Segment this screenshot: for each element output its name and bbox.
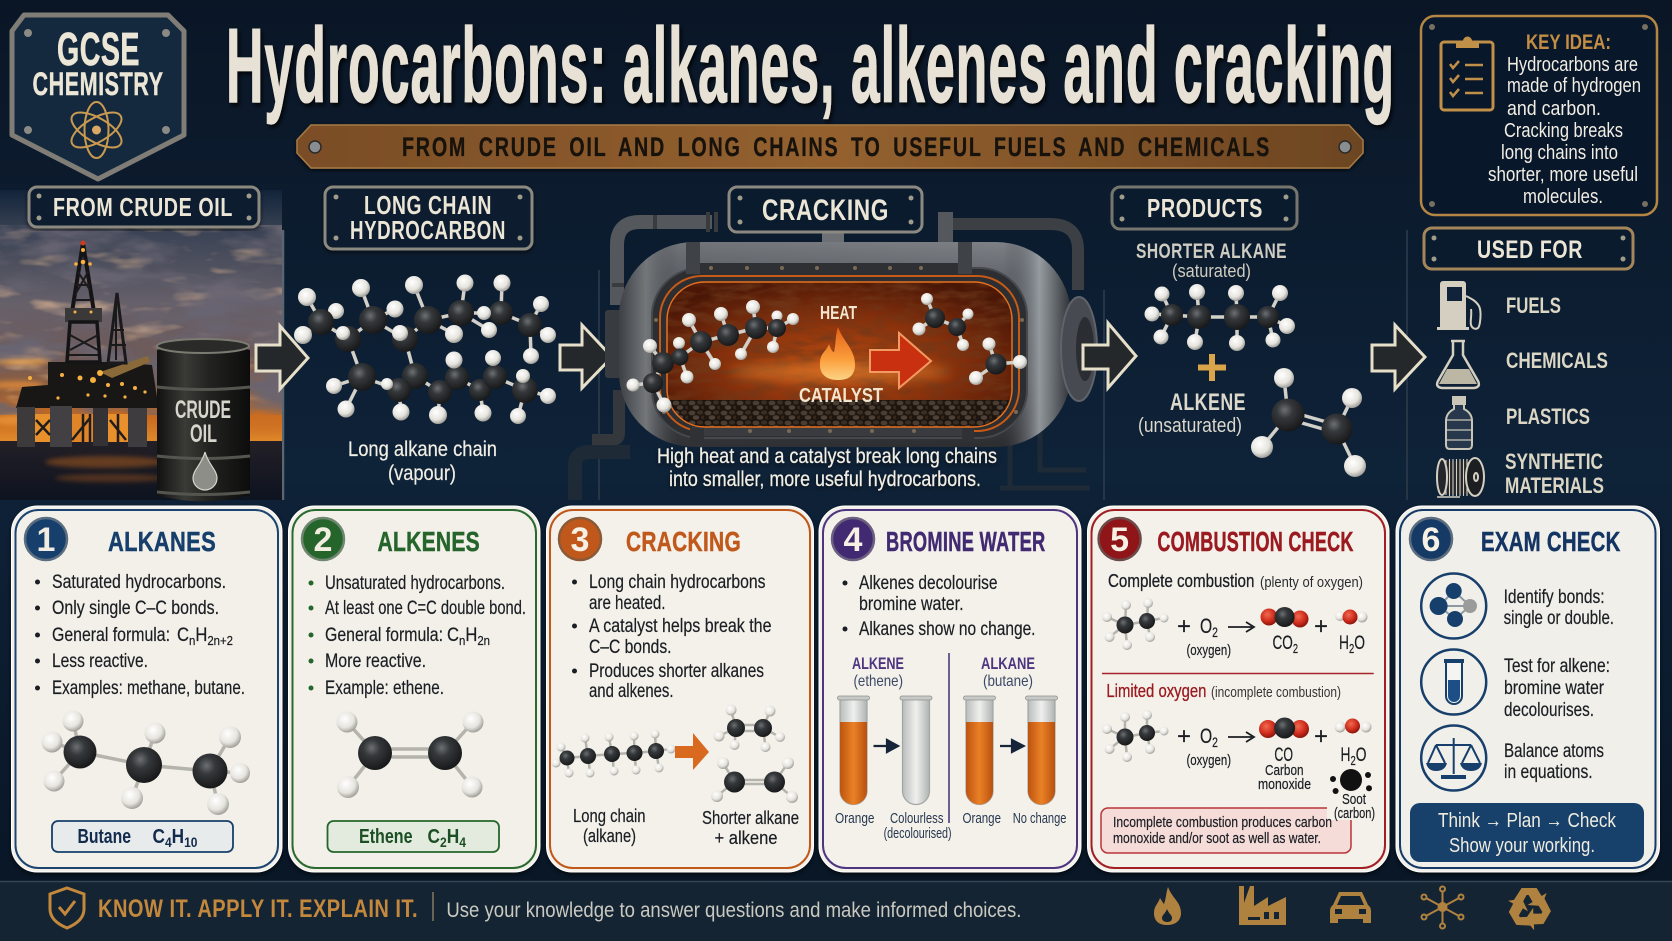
molecule: long chain entering xyxy=(626,300,799,412)
test: alkene xyxy=(835,654,952,842)
subtitle plaque: FROM CRUDE OIL AND LONG CHAINS TO USEFUL FUELS AND CHEMICALS xyxy=(402,132,1271,162)
test: alkene: Orange xyxy=(835,810,874,827)
caption: cracking: High heat and a catalyst break long chains xyxy=(657,445,997,468)
icon: bonds xyxy=(1421,574,1486,638)
check: balance: Balance atoms xyxy=(1504,741,1604,762)
icon: spool xyxy=(1437,458,1484,497)
limited oxygen xyxy=(1102,681,1372,793)
number badge xyxy=(1410,518,1452,560)
icon: flame xyxy=(820,327,855,380)
test: alkane xyxy=(962,654,1066,827)
arrow: crude oil to long chain xyxy=(256,326,308,389)
formula label: 10 xyxy=(184,834,198,850)
plate: products xyxy=(1112,187,1297,229)
number badge xyxy=(25,518,67,560)
molecule: alkene xyxy=(1251,368,1366,477)
bullet list: 2n xyxy=(477,633,490,648)
plate: used for xyxy=(1424,228,1633,269)
barrel: crude oil: CRUDE xyxy=(175,396,231,424)
bullet list: C xyxy=(177,625,191,646)
test: alkene: (ethene) xyxy=(854,673,903,690)
label: shorter alkane: (saturated) xyxy=(1172,261,1251,281)
subtitle plaque xyxy=(297,125,1363,168)
key idea text: and carbon. xyxy=(1507,98,1601,120)
number badge: 4 xyxy=(844,521,863,559)
formula label: C xyxy=(428,826,442,848)
complete combustion xyxy=(1102,571,1368,659)
bullet list: Alkanes show no change. xyxy=(859,619,1036,640)
bullet list: H xyxy=(465,625,477,646)
bullet list: are heated. xyxy=(589,593,666,614)
complete combustion: + xyxy=(1177,613,1191,640)
heading: ALKENES xyxy=(378,526,480,557)
formula label: H xyxy=(172,826,184,848)
plate: From crude oil: FROM CRUDE OIL xyxy=(53,192,233,222)
icon: atom xyxy=(66,102,127,158)
formula label xyxy=(52,821,233,852)
icon: tube orange xyxy=(964,696,996,804)
callout: show your working xyxy=(1410,803,1644,862)
check: alkene test: decolourises. xyxy=(1504,700,1594,721)
plate: cracking: CRACKING xyxy=(762,194,889,227)
use: synthetic materials xyxy=(1437,449,1604,498)
number badge: 2 xyxy=(314,521,332,559)
number badge xyxy=(1099,518,1141,560)
use: synthetic materials: SYNTHETIC xyxy=(1505,449,1603,474)
soot xyxy=(1330,769,1375,822)
molecules: products xyxy=(711,704,798,803)
check: alkene test xyxy=(1421,650,1610,721)
limited oxygen: + xyxy=(1177,723,1191,750)
key idea text: molecules. xyxy=(1523,186,1603,208)
arrow: cracking xyxy=(675,733,709,770)
complete combustion: CO xyxy=(1272,633,1301,654)
limited oxygen: H xyxy=(1340,745,1354,766)
arrow: products to uses xyxy=(1372,325,1425,389)
plate: long chain hydrocarbon: HYDROCARBON xyxy=(350,215,506,245)
caption: long alkane chain xyxy=(348,438,497,485)
limited oxygen: CO xyxy=(1274,745,1293,766)
number badge: 3 xyxy=(571,521,589,559)
badge: GCSE Chemistry xyxy=(12,15,184,179)
formula label: Ethene xyxy=(359,826,412,848)
key idea text: Hydrocarbons are xyxy=(1507,54,1638,76)
limited oxygen: O xyxy=(1356,745,1366,766)
heading: BROMINE WATER xyxy=(886,526,1046,557)
callout: incomplete combustion: Incomplete combustion produces carbon xyxy=(1113,814,1332,831)
bullet list: and alkenes. xyxy=(589,681,674,702)
key idea text: KEY IDEA: xyxy=(1526,31,1611,54)
number badge: 5 xyxy=(1110,521,1129,559)
icon: tube orange xyxy=(838,696,870,804)
footer message: Use your knowledge to answer questions and make informed choices. xyxy=(446,899,1021,922)
icon: test tube xyxy=(1421,650,1486,714)
bullet list: Only single C–C bonds. xyxy=(52,598,219,619)
molecule: ethane xyxy=(1102,598,1168,650)
formula label: 2 xyxy=(440,834,447,850)
complete combustion: (oxygen) xyxy=(1186,642,1231,659)
bullet list: Produces shorter alkanes xyxy=(589,661,764,682)
caption: long alkane chain: (vapour) xyxy=(388,462,456,485)
bullet list: More reactive. xyxy=(325,651,426,672)
complete combustion: Complete combustion xyxy=(1108,571,1254,591)
icon: clipboard xyxy=(1441,37,1493,110)
icon: car xyxy=(1330,892,1371,923)
icon: scales xyxy=(1421,726,1486,790)
footer slogan: KNOW IT. APPLY IT. EXPLAIN IT. xyxy=(98,895,418,923)
test: alkene: ALKENE xyxy=(852,654,904,673)
reactor window xyxy=(667,282,1012,427)
captions: Long chain xyxy=(573,806,646,826)
key idea text: long chains into xyxy=(1501,142,1618,164)
icon: oil rig xyxy=(16,240,157,447)
plate: From crude oil xyxy=(29,187,259,227)
check: alkene test: Test for alkene: xyxy=(1504,656,1610,677)
plate: used for: USED FOR xyxy=(1477,236,1583,264)
heading: CRACKING xyxy=(626,526,741,557)
label: shorter alkane: SHORTER ALKANE xyxy=(1136,240,1287,263)
scene: oil rig at sunset xyxy=(0,190,290,501)
number badge: 6 xyxy=(1422,521,1440,559)
bullet list xyxy=(842,573,1036,640)
catalyst bed xyxy=(667,400,1012,427)
label: alkene xyxy=(1138,389,1246,437)
clouds xyxy=(0,225,290,432)
use: plastics xyxy=(1446,397,1590,449)
panel 3: cracking xyxy=(546,506,814,872)
bullet list xyxy=(35,572,245,699)
number badge xyxy=(559,518,601,560)
soot: Soot xyxy=(1342,791,1367,808)
arrow: long chain to cracker xyxy=(560,325,612,388)
bullet list: Alkenes decolourise xyxy=(859,573,998,594)
plate: products: PRODUCTS xyxy=(1147,193,1263,223)
use: chemicals: CHEMICALS xyxy=(1506,348,1608,373)
use: fuels: FUELS xyxy=(1506,293,1561,318)
test: alkene: (decolourised) xyxy=(884,825,952,842)
test: alkene: Colourless xyxy=(890,810,944,827)
molecule: ethane xyxy=(1102,710,1168,762)
number badge xyxy=(832,518,874,560)
formula label xyxy=(328,821,499,852)
complete combustion: O xyxy=(1200,615,1216,638)
molecule: CO2 xyxy=(1260,607,1308,628)
number badge: 1 xyxy=(37,521,55,559)
molecules: products leaving xyxy=(912,293,1027,385)
key idea text: made of hydrogen xyxy=(1507,75,1641,97)
check: balance: in equations. xyxy=(1504,762,1593,783)
barrel: crude oil xyxy=(157,339,250,502)
limited oxygen: Limited oxygen xyxy=(1106,681,1206,701)
bullet list: A catalyst helps break the xyxy=(589,616,772,637)
icon: fuel pump xyxy=(1437,281,1481,330)
molecule: long alkane chain xyxy=(294,274,556,424)
heading: COMBUSTION CHECK xyxy=(1157,526,1354,557)
bullet list: Saturated hydrocarbons. xyxy=(52,572,226,593)
bullet list: Unsaturated hydrocarbons. xyxy=(325,573,505,594)
cracking vessel xyxy=(575,212,1097,500)
plate: long chain hydrocarbon xyxy=(325,187,532,249)
molecule: ethene xyxy=(336,712,484,798)
bullet list: General formula: xyxy=(325,625,443,646)
formula label: 4 xyxy=(165,834,172,850)
limited oxygen: + xyxy=(1314,723,1328,750)
panel 6: exam check xyxy=(1396,506,1660,872)
callout: show your working: Think → Plan → Check xyxy=(1438,810,1617,832)
molecule: butane xyxy=(42,710,250,815)
soot: (carbon) xyxy=(1334,805,1375,822)
check: bonds: Identify bonds: xyxy=(1504,587,1605,608)
sea xyxy=(0,441,282,501)
molecule: CO xyxy=(1259,718,1309,738)
captions: (alkane) xyxy=(583,826,636,846)
arrow: reaction xyxy=(870,333,931,388)
test: alkane: Orange xyxy=(962,810,1001,827)
check: balance xyxy=(1421,726,1604,790)
limited oxygen: (incomplete combustion) xyxy=(1211,684,1341,701)
badge: GCSE Chemistry: CHEMISTRY xyxy=(32,66,164,102)
panel 2: alkenes xyxy=(288,506,540,872)
formula label: H xyxy=(447,826,459,848)
bullet list xyxy=(572,572,772,702)
complete combustion: 2 xyxy=(1212,624,1218,640)
icon: flame xyxy=(1154,887,1181,925)
complete combustion: (plenty of oxygen) xyxy=(1260,574,1363,591)
limited oxygen: Carbon xyxy=(1265,762,1304,779)
bullet list: H xyxy=(195,625,207,646)
molecule: water xyxy=(1335,610,1368,624)
heading: ALKANES xyxy=(108,526,216,557)
plate: cracking xyxy=(729,187,922,232)
arrow xyxy=(874,740,898,752)
badge: GCSE Chemistry: GCSE xyxy=(57,23,140,75)
test: alkane: (butane) xyxy=(983,673,1033,690)
number badge xyxy=(302,518,344,560)
bullet list: bromine water. xyxy=(859,594,964,615)
use: chemicals xyxy=(1437,341,1608,388)
bullet list: n xyxy=(459,633,465,648)
footer band xyxy=(0,881,1672,941)
check: bonds xyxy=(1421,574,1614,638)
check: alkene test: bromine water xyxy=(1504,678,1605,699)
bullet list xyxy=(308,573,526,699)
callout: incomplete combustion: monoxide and/or soot as well as water. xyxy=(1113,830,1321,847)
callout: incomplete combustion xyxy=(1101,804,1352,853)
caption: long alkane chain: Long alkane chain xyxy=(348,438,497,461)
bullet list: C xyxy=(447,625,461,646)
icon: recycle xyxy=(1504,888,1555,933)
complete combustion: H xyxy=(1339,633,1353,654)
bullet list: C–C bonds. xyxy=(589,637,672,658)
caption: cracking xyxy=(657,445,997,491)
limited oxygen: O xyxy=(1200,725,1216,748)
test: alkane: No change xyxy=(1013,810,1066,827)
formula label: Butane xyxy=(78,826,131,848)
panel 4: bromine water xyxy=(819,506,1081,872)
use: synthetic materials: MATERIALS xyxy=(1505,473,1604,498)
bullet list: Long chain hydrocarbons xyxy=(589,572,766,593)
formula label: C xyxy=(152,826,167,848)
complete combustion: 2 xyxy=(1293,641,1298,656)
complete combustion: 2 xyxy=(1349,641,1354,656)
icon: oil drop xyxy=(193,452,217,490)
bullet list: Example: ethene. xyxy=(325,678,444,699)
caption: cracking: into smaller, more useful hydrocarbons. xyxy=(669,468,981,491)
barrel: crude oil: OIL xyxy=(190,420,217,448)
bullet list: Less reactive. xyxy=(52,651,148,672)
plus sign xyxy=(1198,354,1226,381)
bullet list: n xyxy=(189,633,195,648)
bullet list: At least one C=C double bond. xyxy=(325,598,526,619)
label: heat: HEAT xyxy=(820,303,857,323)
arrow: cracker to products xyxy=(1083,323,1136,388)
molecule: long chain xyxy=(552,730,676,778)
pipes xyxy=(575,212,1090,500)
bullet list: 2n+2 xyxy=(207,633,233,648)
key idea text xyxy=(1488,31,1641,208)
captions: + alkene xyxy=(714,828,778,848)
key idea text: Cracking breaks xyxy=(1504,120,1623,142)
icon: flask xyxy=(1437,341,1479,388)
limited oxygen: 2 xyxy=(1212,734,1218,750)
icon: tube orange xyxy=(1026,696,1058,804)
icon: molecule network xyxy=(1422,886,1464,928)
label: catalyst: CATALYST xyxy=(799,385,883,407)
molecule: shorter alkane xyxy=(1144,284,1295,351)
test: alkane: ALKANE xyxy=(981,654,1035,673)
use: fuels xyxy=(1437,281,1561,330)
label: shorter alkane xyxy=(1136,240,1287,281)
plate: long chain hydrocarbon: LONG CHAIN xyxy=(364,190,492,220)
limited oxygen: monoxide xyxy=(1258,776,1311,793)
captions xyxy=(573,806,799,848)
check: bonds: single or double. xyxy=(1504,608,1614,629)
icon: bottle xyxy=(1446,397,1472,449)
limited oxygen: (oxygen) xyxy=(1186,752,1231,769)
captions: Shorter alkane xyxy=(702,808,799,828)
panel 1: alkanes xyxy=(12,506,282,872)
key idea text: shorter, more useful xyxy=(1488,164,1638,186)
use: plastics: PLASTICS xyxy=(1506,404,1590,429)
arrow xyxy=(1000,740,1024,752)
heading: EXAM CHECK xyxy=(1481,526,1621,557)
bullet list: General formula: xyxy=(52,625,170,646)
molecule: water xyxy=(1334,718,1372,734)
formula label: 4 xyxy=(459,834,466,850)
icon: shield xyxy=(50,888,84,928)
complete combustion: O xyxy=(1354,633,1365,654)
complete combustion: + xyxy=(1314,613,1328,640)
label: alkene: (unsaturated) xyxy=(1138,415,1242,437)
callout: show your working: Show your working. xyxy=(1449,835,1595,857)
bullet list: Examples: methane, butane. xyxy=(52,678,245,699)
panel: key idea xyxy=(1421,16,1657,215)
icon: tube colourless xyxy=(900,696,932,804)
icon: factory xyxy=(1239,886,1286,925)
label: alkene: ALKENE xyxy=(1170,389,1246,416)
limited oxygen: 2 xyxy=(1350,753,1356,768)
panel 5: combustion check xyxy=(1088,506,1389,872)
